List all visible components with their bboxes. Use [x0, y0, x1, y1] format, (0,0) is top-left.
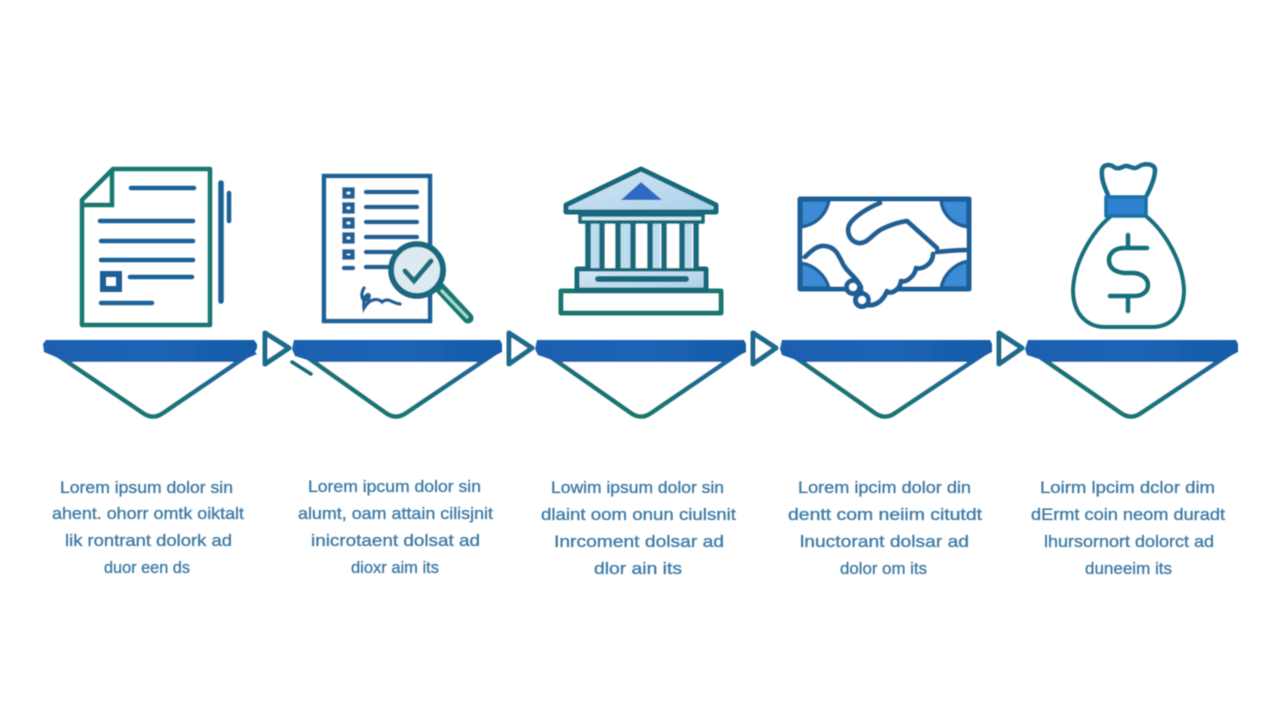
- text block 1: ahent. ohorr omtk oiktalt: [52, 504, 244, 523]
- text block 3: Inrcoment dolsar ad: [554, 532, 724, 551]
- text block 4: [788, 478, 982, 578]
- text block 4: dentt com neiim citutdt: [788, 505, 982, 524]
- icon: checklist with magnifier: [324, 176, 468, 321]
- text block 1: Lorem ipsum dolor sin: [60, 478, 233, 497]
- text block 5: lhursornort dolorct ad: [1044, 532, 1214, 551]
- icon: money bag: [1073, 164, 1184, 327]
- text block 1: lik rontrant dolork ad: [65, 531, 232, 550]
- text block 3: Lowim ipsum dolor sin: [551, 478, 724, 497]
- text block 2: Lorem ipcum dolor sin: [308, 477, 481, 496]
- text block 4: lnuctorant dolsar ad: [800, 532, 969, 551]
- text block 5: [1031, 478, 1225, 578]
- step 1 banner: [43, 340, 257, 416]
- text block 2: alumt, oam attain cilisjnit: [298, 504, 493, 523]
- text block 3: dlaint oom onun ciulsnit: [541, 505, 736, 524]
- text block 4: Lorem ipcim dolor din: [798, 478, 971, 497]
- text block 2: dioxr aim its: [351, 558, 439, 577]
- step 5 banner: [1025, 340, 1238, 416]
- text block 5: dErmt coin neom duradt: [1031, 505, 1225, 524]
- text block 5: Loirm lpcim dclor dim: [1040, 478, 1215, 497]
- text block 2: inicrotaent dolsat ad: [311, 531, 480, 550]
- arrow 2: [509, 333, 532, 364]
- icon: handshake on banknote: [800, 199, 969, 306]
- step 4 banner: [780, 340, 992, 416]
- text block 1: [52, 478, 244, 577]
- text block 5: duneeim its: [1085, 559, 1172, 578]
- icon: bank building: [561, 169, 721, 313]
- arrow 1: [265, 333, 289, 364]
- text block 4: dolor om its: [840, 559, 927, 578]
- step 2 banner: [292, 340, 502, 416]
- text block 1: duor een ds: [104, 558, 190, 577]
- text block 3: dlor ain its: [594, 559, 682, 578]
- text block 3: [541, 478, 736, 578]
- arrow 4: [999, 333, 1022, 364]
- text block 2: [298, 477, 493, 577]
- icon: document with pen: [82, 169, 229, 325]
- step 3 banner: [535, 340, 746, 416]
- arrow 3: [753, 333, 776, 364]
